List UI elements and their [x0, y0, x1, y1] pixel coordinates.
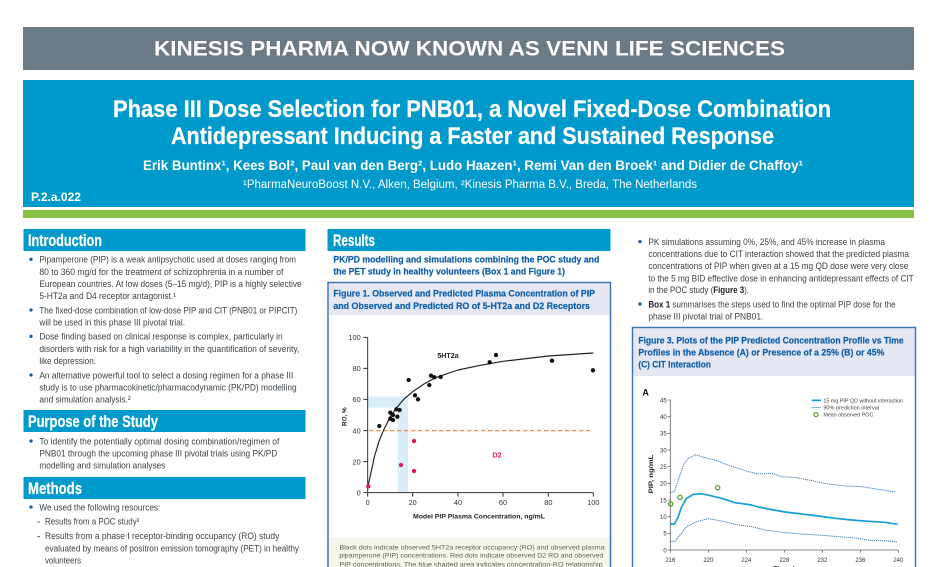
heading: Methods: Methods — [28, 479, 82, 498]
text block: PK simulations bullets: concentrations of PIP when given at a 15 mg QD dose were very close — [648, 261, 908, 271]
line chart: panel A: 25 — [660, 465, 667, 471]
line chart: panel A: 30 — [660, 448, 667, 454]
subheading: results: PK/PD modelling and simulations combining the POC study and — [333, 255, 599, 265]
authors: Erik Buntinx¹, Kees Bol², Paul van den Berg², Ludo Haazen¹, Remi Van den Broek¹ and Didier de Chaffoy¹ — [143, 158, 803, 173]
figure 1 title — [333, 289, 595, 311]
text block: methods: evaluated by means of positron emission tomography (PET) in healthy — [45, 543, 300, 553]
line chart: panel A: 228 — [779, 558, 790, 564]
scatter chart: receptor occupancy: 100 — [348, 333, 361, 342]
panel: figure 3 — [632, 328, 916, 567]
scatter chart: receptor occupancy: 5HT2a — [437, 353, 459, 360]
subheading: results — [333, 255, 599, 277]
text block: methods: Results from a phase I receptor-binding occupancy (RO) study — [45, 531, 280, 541]
text block: introduction bullets: will be used in this phase III pivotal trial. — [38, 318, 185, 328]
line chart: panel A: 232 — [817, 558, 828, 564]
text block: introduction bullets: An alternative powerful tool to select a dosing regimen for a phase III — [39, 370, 293, 380]
poster number: P.2.a.022 — [31, 192, 81, 204]
text block: purpose: PNB01 through the upcoming phase III pivotal trials using PK/PD — [39, 449, 277, 459]
figure 1 caption: pipamperone (PIP) concentrations. Red dots indicate observed D2 RO and observed — [339, 553, 604, 560]
text block: PK simulations bullets: to the 5 mg BID effective dose in enhancing antidepressant effects of CIT — [648, 273, 914, 283]
scatter chart: receptor occupancy: 60 — [499, 498, 507, 507]
banner: company name: KINESIS PHARMA NOW KNOWN AS VENN LIFE SCIENCES — [154, 38, 785, 60]
text block: PK simulations bullets: PK simulations assuming 0%, 25%, and 45% increase in plasma — [648, 237, 885, 247]
text block: PK simulations bullets — [638, 237, 914, 322]
title: Antidepressant Inducing a Faster and Sustained Response — [171, 123, 774, 150]
figure 3 title — [638, 335, 904, 369]
text block: introduction bullets: like depression. — [39, 356, 96, 366]
column: right — [632, 237, 916, 567]
line chart: panel A: 236 — [855, 558, 866, 564]
scatter chart: receptor occupancy: 80 — [544, 498, 552, 507]
scatter chart: receptor occupancy — [341, 333, 599, 521]
text block: introduction bullets — [29, 255, 302, 404]
text block: introduction bullets: Pipamperone (PIP) is a weak antipsychotic used at doses ranging from — [39, 255, 296, 265]
title: Phase III Dose Selection for PNB01, a Novel Fixed-Dose Combination — [113, 96, 831, 123]
text block: introduction bullets: 5-HT2a and D4 receptor antagonist.¹ — [39, 291, 176, 301]
scatter chart: receptor occupancy: Model PIP Plasma Concentration, ng/mL — [413, 514, 545, 521]
scatter chart: receptor occupancy: 20 — [353, 457, 361, 466]
line chart: panel A: 20 — [660, 482, 667, 488]
text block: introduction bullets: Dose finding based on clinical response is complex, particularly in — [39, 332, 283, 342]
line chart: panel A: Mean observed POC — [823, 413, 873, 419]
text block: methods: volunteers — [45, 555, 82, 565]
title — [113, 96, 831, 150]
affiliations: ¹PharmaNeuroBoost N.V., Alken, Belgium, ²Kinesis Pharma B.V., Breda, The Netherlands — [243, 179, 697, 191]
figure 3 title: Figure 3. Plots of the PIP Predicted Concentration Profile vs Time — [638, 335, 904, 345]
text block: introduction bullets: The fixed-dose combination of low-dose PIP and CIT (PNB01 or PIPCIT) — [39, 305, 297, 315]
text block: methods: We used the following resources: — [39, 502, 160, 512]
text block: introduction bullets: and simulation analysis.² — [39, 394, 131, 404]
scatter chart: receptor occupancy: 60 — [353, 395, 361, 404]
line chart: panel A: 15 mg PIP QD without interaction — [823, 398, 903, 404]
figure 1 caption — [339, 544, 605, 567]
text block: introduction bullets: disorders with risk for a high variability in the quantification of severity, — [39, 344, 299, 354]
line chart: panel A: 10 — [660, 515, 667, 521]
heading: Methods — [24, 477, 306, 499]
line chart: panel A: 224 — [741, 558, 752, 564]
green divider bar — [23, 210, 914, 218]
line chart: panel A: 5 — [663, 532, 667, 538]
line chart: panel A: 90% prediction interval — [823, 406, 879, 412]
text block: purpose: modelling and simulation analyses — [39, 461, 166, 471]
text block: introduction bullets: European countries. At low doses (5–15 mg/d), PIP is a highly selective — [39, 279, 302, 289]
scatter chart: receptor occupancy: D2 — [492, 453, 502, 460]
line chart: panel A: PIP, ng/mL — [648, 455, 655, 493]
text block: PK simulations bullets: Box 1 summarises the steps used to find the optimal PIP dose for the — [648, 299, 896, 309]
text block: introduction bullets: study is to use pharmacokinetic/pharmacodynamic (PK/PD) modelling — [39, 382, 297, 392]
column: middle — [328, 229, 610, 567]
figure 1 title: and Observed and Predicted RO of 5-HT2a and D2 Receptors — [333, 301, 590, 311]
line chart: panel A — [642, 387, 904, 567]
text block: introduction bullets: 80 to 360 mg/d for the treatment of schizophrenia in a number of — [39, 267, 284, 277]
panel: figure 1 — [328, 282, 610, 567]
line chart: panel A: 15 — [660, 498, 667, 504]
line chart: panel A: 216 — [665, 558, 676, 564]
scatter chart: receptor occupancy: 0 — [366, 498, 370, 507]
line chart: panel A: 220 — [703, 558, 714, 564]
text block: PK simulations bullets: phase III pivotal trial of PNB01. — [648, 312, 763, 322]
line chart: panel A: 240 — [893, 558, 904, 564]
heading: Purpose of the Study — [24, 410, 306, 432]
column: left — [24, 229, 306, 565]
text block: purpose: To identify the potentially optimal dosing combination/regimen of — [39, 436, 280, 446]
heading: Introduction — [24, 229, 306, 251]
heading: Results — [328, 229, 610, 251]
banner: company name — [23, 27, 914, 70]
line chart: panel A: 40 — [660, 415, 667, 421]
figure 3 title: (C) CIT Interaction — [638, 359, 711, 369]
figure 1 caption: Black dots indicate observed 5HT2a receptor occupancy (RO) and observed plasma — [339, 544, 605, 551]
line chart: panel A: A — [642, 387, 649, 397]
line chart: panel A: 0 — [663, 548, 667, 554]
figure 1 title: Figure 1. Observed and Predicted Plasma Concentration of PIP — [333, 289, 595, 299]
scatter chart: receptor occupancy: 20 — [409, 498, 417, 507]
scatter chart: receptor occupancy: 80 — [353, 364, 361, 373]
heading: Purpose of the Study: Purpose of the Study — [28, 412, 158, 431]
scatter chart: receptor occupancy: 0 — [357, 488, 361, 497]
line chart: panel A: 35 — [660, 432, 667, 438]
heading: Introduction: Introduction — [28, 231, 102, 250]
scatter chart: receptor occupancy: 40 — [454, 498, 462, 507]
heading: Results: Results — [333, 231, 375, 250]
scatter chart: receptor occupancy: 100 — [587, 498, 599, 507]
text block: PK simulations bullets: in the POC study (Figure 3). — [648, 285, 749, 295]
text block: methods — [29, 502, 300, 565]
text block: methods: Results from a POC study³ — [45, 517, 139, 527]
figure 3 title: Profiles in the Absence (A) or Presence of a 25% (B) or 45% — [638, 347, 884, 357]
text block: PK simulations bullets: concentrations due to CIT interaction showed that the predicted plasma — [648, 249, 909, 259]
scatter chart: receptor occupancy: RO, % — [341, 407, 348, 426]
line chart: panel A: 45 — [660, 398, 667, 404]
scatter chart: receptor occupancy: 40 — [353, 426, 361, 435]
text block: purpose — [29, 436, 280, 471]
title panel — [23, 80, 914, 207]
subheading: results: the PET study in healthy volunteers (Box 1 and Figure 1) — [333, 267, 565, 277]
